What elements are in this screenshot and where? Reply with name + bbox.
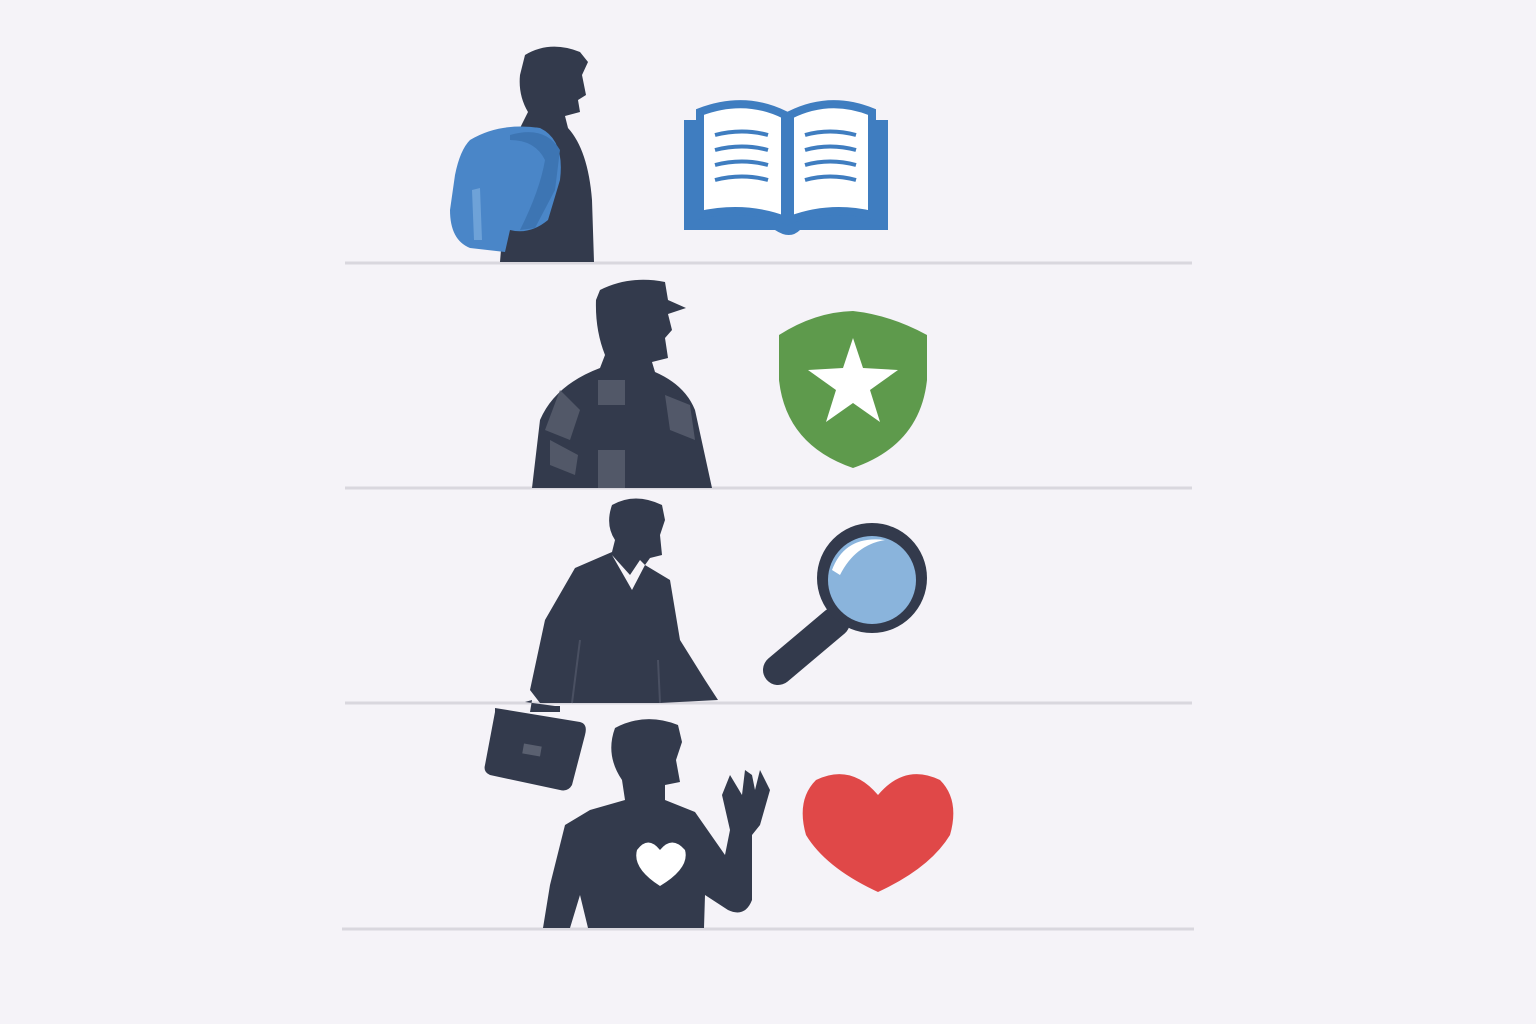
icon: green shield with star	[779, 311, 927, 468]
figure: businessman with briefcase	[485, 498, 718, 790]
figure: volunteer waving	[543, 719, 770, 928]
briefcase	[485, 700, 586, 790]
icon: open book	[684, 104, 888, 235]
figure: soldier	[532, 280, 712, 488]
backpack	[450, 126, 561, 252]
icon: red heart	[803, 774, 953, 892]
icon: magnifying glass	[778, 523, 927, 670]
figure: student with backpack	[450, 47, 594, 262]
